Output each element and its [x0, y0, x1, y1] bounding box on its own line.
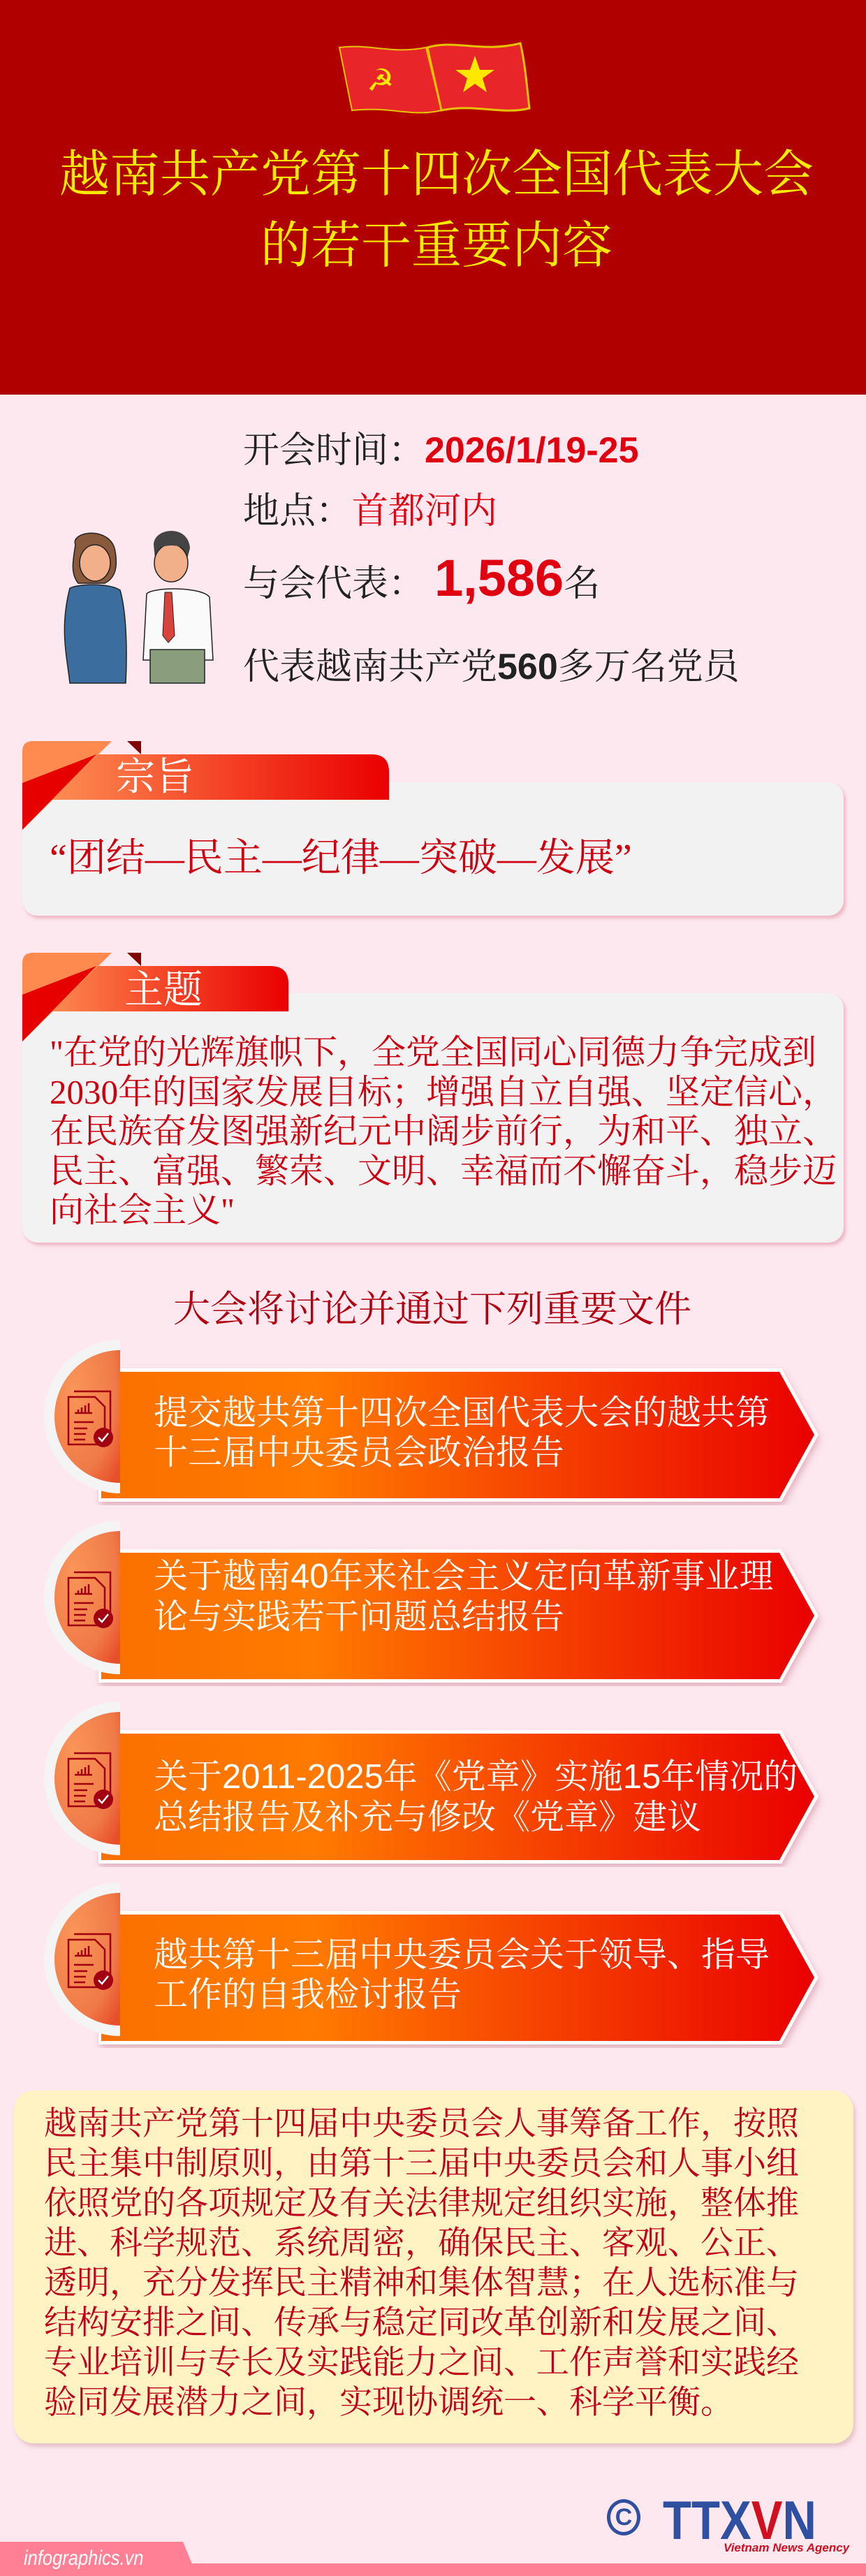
panel: personnel note: 越南共产党第十四届中央委员会人事筹备工作，按照	[44, 2106, 799, 2142]
icon: document	[68, 1934, 110, 1987]
info: place: 地点：首都河内	[243, 492, 497, 532]
panel: personnel note: 结构安排之间、传承与稳定同改革创新和发展之间、	[44, 2305, 799, 2341]
tab: 宗旨	[22, 741, 389, 830]
theme text	[50, 1033, 837, 1229]
heading: documents: 大会将讨论并通过下列重要文件	[173, 1289, 691, 1330]
footer tab: infographics.vn	[0, 2542, 192, 2569]
logo: TTXVN: TTXVN	[663, 2489, 816, 2551]
header band	[0, 0, 866, 395]
illustration: two delegates	[64, 531, 214, 684]
title: 越南共产党第十四次全国代表大会	[59, 147, 814, 203]
item 3	[44, 1702, 823, 1867]
title: 的若干重要内容	[260, 218, 612, 274]
theme text: 在民族奋发图强新纪元中阔步前行，为和平、独立、	[50, 1112, 837, 1150]
panel: personnel note: 专业培训与专长及实践能力之间、工作声誉和实践经	[44, 2345, 799, 2381]
item 4: 越共第十三届中央委员会关于领导、指导	[154, 1935, 770, 1974]
icon: document	[68, 1572, 110, 1625]
purpose text: “团结—民主—纪律—突破—发展”	[50, 837, 632, 880]
logo: TTXVN: C	[615, 2504, 632, 2531]
tab: 主题	[22, 953, 288, 1041]
theme text: 向社会主义"	[50, 1191, 235, 1229]
info: time: 开会时间：2026/1/19-25	[243, 430, 639, 471]
panel: personnel note	[14, 2091, 853, 2443]
footer band	[0, 2563, 866, 2576]
panel: personnel note: 验同发展潜力之间，实现协调统一、科学平衡。	[44, 2385, 733, 2421]
info: delegates: 与会代表：1,586名	[243, 549, 600, 607]
footer tab: infographics.vn: infographics.vn	[24, 2547, 144, 2570]
item 4: 工作的自我检讨报告	[154, 1975, 462, 2014]
icon: flags: ☭	[367, 63, 394, 98]
panel: theme: 主题	[124, 969, 203, 1012]
panel: purpose: 宗旨	[116, 756, 194, 799]
item 1: 十三届中央委员会政治报告	[154, 1433, 564, 1472]
panel: personnel note: 进、科学规范、系统周密，确保民主、客观、公正、	[44, 2225, 799, 2262]
title	[59, 147, 814, 274]
item 3: 关于2011-2025年《党章》实施15年情况的	[154, 1757, 798, 1796]
item 4	[44, 1882, 823, 2048]
theme text: "在党的光辉旗帜下，全党全国同心同德力争完成到	[50, 1033, 816, 1071]
logo: TTXVN	[607, 2489, 850, 2554]
panel: purpose	[22, 741, 848, 921]
panel: personnel note: 民主集中制原则，由第十三届中央委员会和人事小组	[44, 2146, 799, 2182]
theme text: 民主、富强、繁荣、文明、幸福而不懈奋斗，稳步迈	[50, 1151, 837, 1190]
icon: document	[68, 1391, 110, 1444]
panel: personnel note: 透明，充分发挥民主精神和集体智慧；在人选标准与	[44, 2265, 799, 2301]
item 1	[44, 1340, 823, 1505]
item 2: 论与实践若干问题总结报告	[154, 1597, 564, 1636]
info: members: 代表越南共产党560多万名党员	[243, 647, 740, 687]
item 2: 关于越南40年来社会主义定向革新事业理	[154, 1557, 774, 1595]
logo: TTXVN: Vietnam News Agency	[724, 2541, 849, 2554]
item 3: 总结报告及补充与修改《党章》建议	[154, 1798, 701, 1836]
panel: personnel note: 依照党的各项规定及有关法律规定组织实施，整体推	[44, 2186, 799, 2222]
item 2	[44, 1521, 823, 1686]
icon: flags	[338, 42, 531, 113]
panel: theme	[22, 953, 848, 1247]
item 1: 提交越共第十四次全国代表大会的越共第	[154, 1393, 770, 1432]
icon: document	[68, 1753, 110, 1806]
theme text: 2030年的国家发展目标；增强自立自强、坚定信心，	[50, 1073, 837, 1111]
